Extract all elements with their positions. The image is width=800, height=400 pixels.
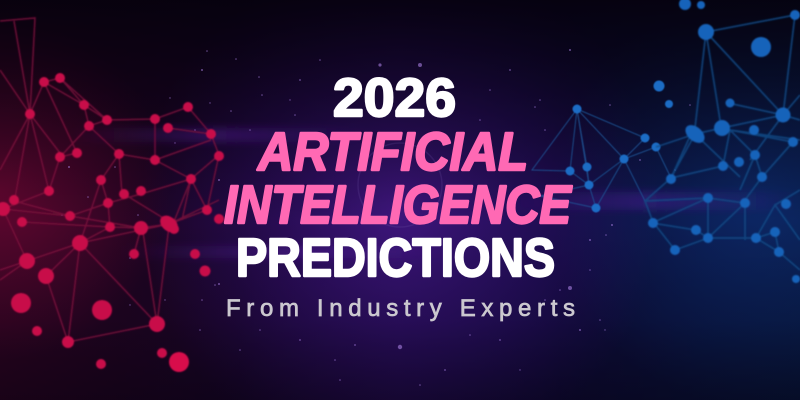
small blue links <box>532 109 671 208</box>
network: red <box>0 18 224 372</box>
subtitle: From Industry Experts <box>226 295 575 322</box>
title <box>224 68 573 288</box>
heading: intelligence: INTELLIGENCE <box>224 175 573 235</box>
small blue nodes <box>566 80 673 212</box>
star field <box>61 49 691 386</box>
central ring <box>358 143 442 227</box>
heading: predictions: PREDICTIONS <box>236 228 555 288</box>
heading: 2026: 2026 <box>333 68 456 128</box>
red nodes <box>0 73 224 372</box>
blue links <box>645 15 800 270</box>
network: small blue <box>532 80 673 212</box>
blue nodes <box>648 0 800 283</box>
network: blurred blue <box>645 0 800 283</box>
heading: artificial: ARTIFICIAL <box>256 122 528 182</box>
red links <box>0 18 219 342</box>
